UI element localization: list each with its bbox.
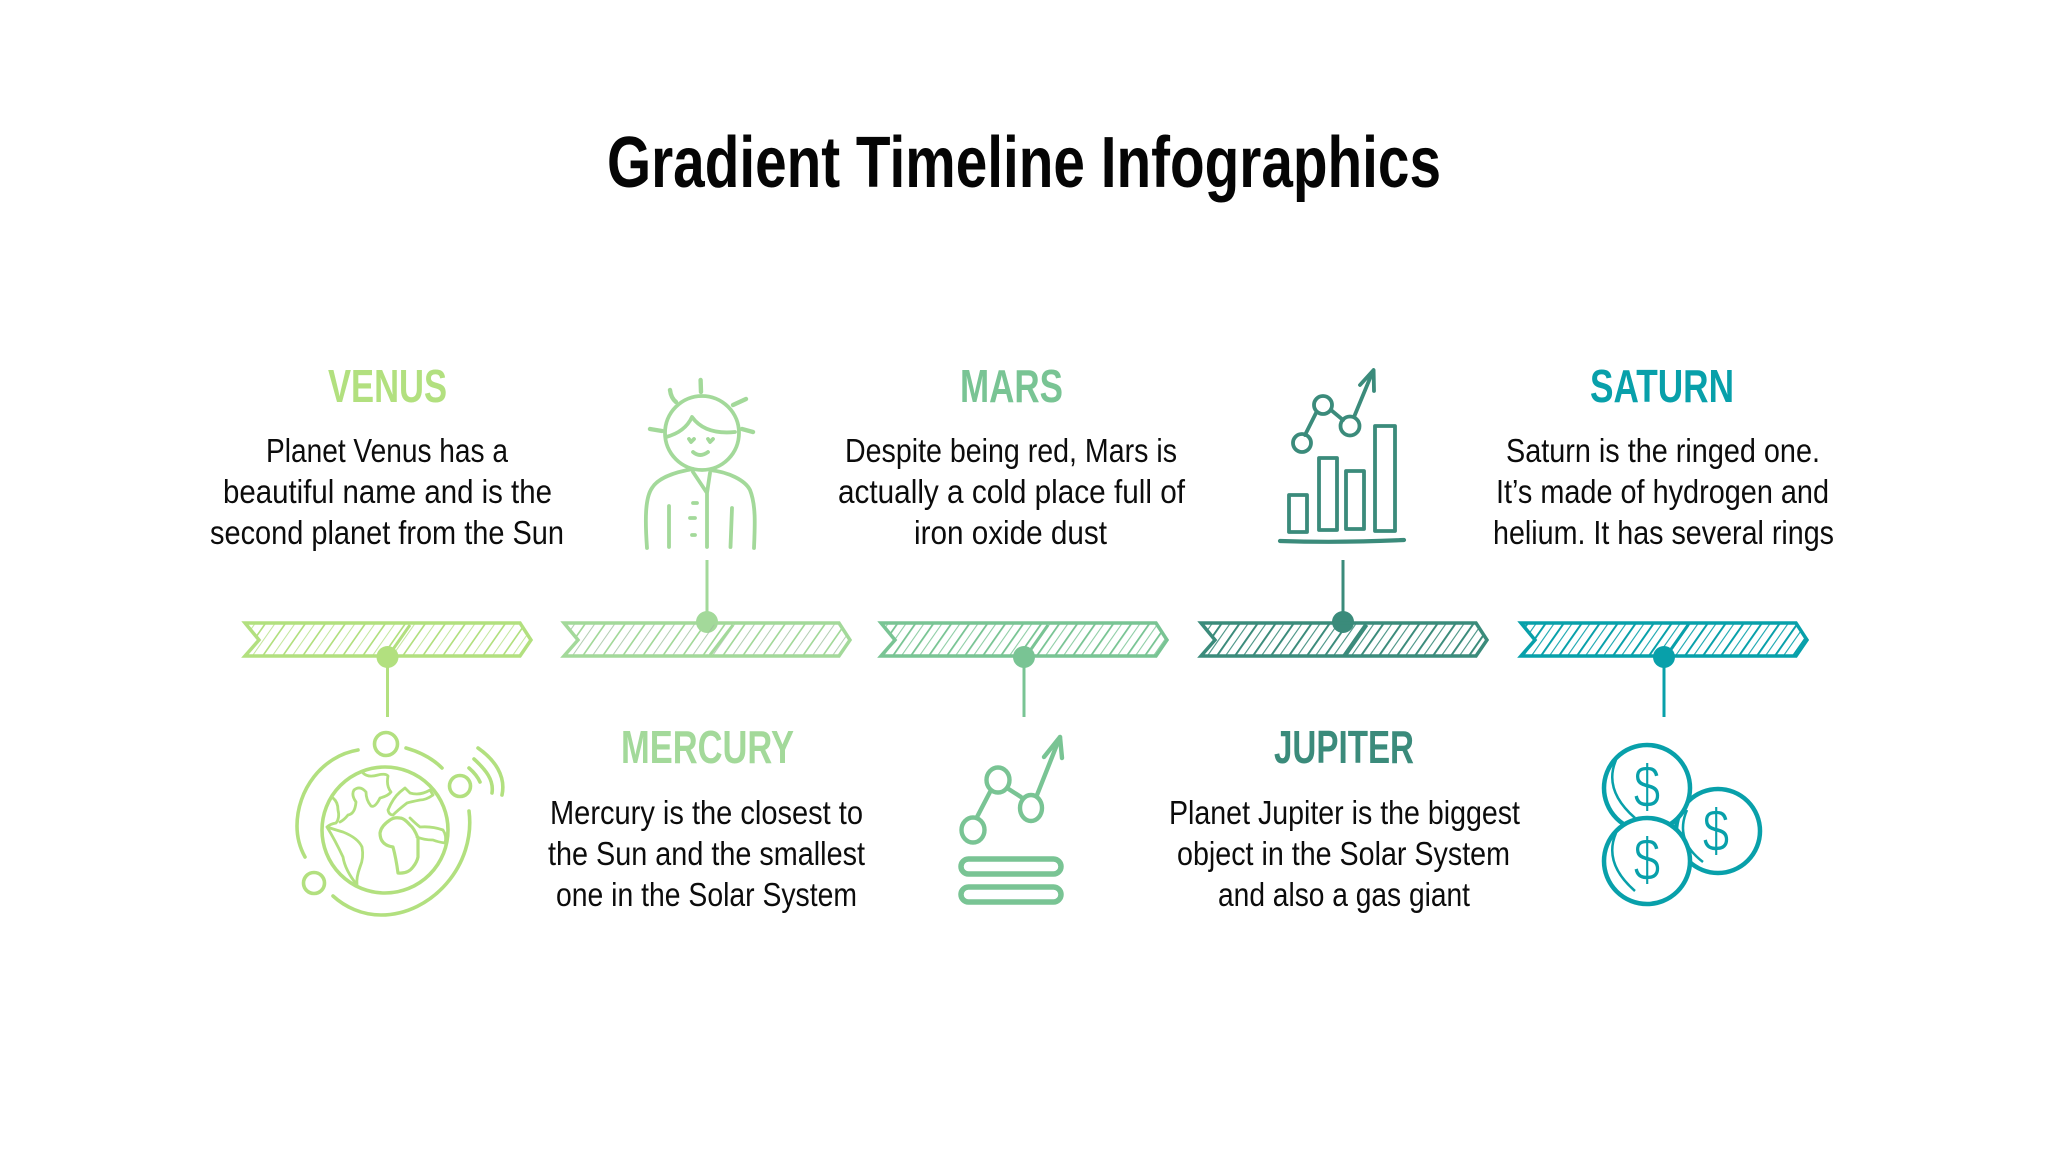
connector: Mars (1013, 646, 1035, 717)
text block: Mars description (838, 432, 1186, 551)
arrow banner: Jupiter (1201, 623, 1487, 656)
text block: Saturn description: helium. It has several rings (1493, 514, 1834, 551)
icon: person with sun rays (646, 380, 755, 548)
coin: bottom left (1604, 818, 1690, 904)
heading: Mercury: MERCURY (621, 721, 794, 773)
text block: Jupiter description: and also a gas giant (1218, 876, 1470, 913)
text block: Venus description: beautiful name and is the (223, 473, 552, 510)
coin: right: $ (1703, 797, 1729, 864)
arrow banner: Venus (245, 623, 531, 656)
heading: Venus: VENUS (328, 360, 447, 412)
icon: bar chart with trend arrow (1280, 370, 1404, 542)
text block: Jupiter description (1169, 794, 1520, 913)
coin: bottom left: $ (1634, 826, 1660, 893)
text block: Jupiter description: object in the Solar System (1177, 835, 1510, 872)
text block: Mercury description: the Sun and the smallest (548, 835, 865, 872)
timeline step: Jupiter (1169, 370, 1520, 913)
text block: Saturn description: It’s made of hydrogen and (1496, 473, 1829, 510)
connector: Saturn (1653, 646, 1675, 717)
timeline step: Mars (838, 360, 1186, 902)
text block: Mars description: Despite being red, Mars is (845, 432, 1177, 469)
icon: globe with orbit (297, 732, 503, 915)
text block: Mercury description (548, 794, 865, 913)
arrow banner: Mercury (564, 623, 850, 656)
text block: Venus description (210, 432, 564, 551)
text block: Mercury description: one in the Solar System (556, 876, 857, 913)
text block: Venus description: second planet from the Sun (210, 514, 564, 551)
coin: top left (1604, 745, 1690, 831)
text block: Saturn description: Saturn is the ringed one. (1506, 432, 1820, 469)
icon: growth line and bars (961, 737, 1062, 902)
coin: top left: $ (1634, 753, 1660, 820)
heading: Mars: MARS (960, 360, 1063, 412)
text block: Saturn description (1493, 432, 1834, 551)
timeline step: Venus (210, 360, 564, 915)
text block: Mars description: iron oxide dust (914, 514, 1107, 551)
connector: Mercury (696, 560, 718, 633)
text block: Mercury description: Mercury is the closest to (550, 794, 863, 831)
coin: right (1676, 789, 1760, 873)
text block: Mars description: actually a cold place full of (838, 473, 1186, 510)
connector: Venus (376, 646, 398, 717)
heading: Saturn: SATURN (1590, 360, 1734, 412)
arrow banner: Saturn (1521, 623, 1807, 656)
arrow banner: Mars (881, 623, 1167, 656)
timeline step: Mercury (548, 380, 865, 913)
timeline step: Saturn (1493, 360, 1834, 904)
title: Gradient Timeline Infographics (607, 123, 1441, 203)
heading: Jupiter: JUPITER (1274, 721, 1414, 773)
text block: Venus description: Planet Venus has a (266, 432, 509, 469)
connector: Jupiter (1332, 560, 1354, 633)
text block: Jupiter description: Planet Jupiter is the biggest (1169, 794, 1520, 831)
icon: three dollar coins (1604, 745, 1760, 904)
